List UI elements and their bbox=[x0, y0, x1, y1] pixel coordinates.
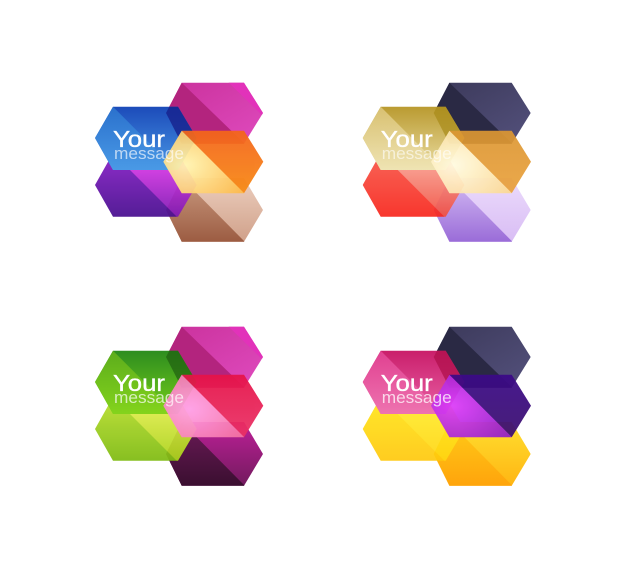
hexagon: amber centre bbox=[431, 130, 531, 194]
label: your message bbox=[381, 126, 452, 163]
hexagon: magenta top right bbox=[169, 326, 263, 388]
label: your message: message bbox=[114, 145, 184, 163]
infographic: gold and red hexagons bbox=[358, 80, 538, 244]
hexagon: blue upper left bbox=[95, 106, 196, 170]
label: your message bbox=[381, 370, 452, 407]
label: your message bbox=[113, 370, 184, 407]
hexagon: khaki upper left bbox=[362, 106, 464, 170]
infographic: green and pink hexagons bbox=[90, 324, 270, 488]
label: your message: Your bbox=[113, 126, 165, 152]
hexagon: red lower left bbox=[362, 162, 464, 217]
hexagon: orange centre bbox=[163, 130, 264, 194]
hexagon: pink centre bbox=[163, 374, 264, 438]
hexagon: amber bottom right bbox=[434, 422, 531, 486]
hexagon: magenta top right bbox=[169, 82, 263, 144]
hexagon: lilac bottom right bbox=[435, 186, 530, 242]
hexagon: navy top right bbox=[436, 82, 530, 144]
infographic set bbox=[95, 82, 531, 486]
hexagon: purple lower left bbox=[95, 162, 196, 217]
label: your message: message bbox=[114, 389, 184, 407]
infographic: pink and yellow hexagons bbox=[358, 324, 538, 488]
hexagon: tan bottom right bbox=[166, 186, 263, 242]
label: your message: Your bbox=[381, 370, 433, 396]
hexagon: lime lower left bbox=[95, 406, 196, 461]
label: your message: message bbox=[382, 145, 452, 163]
hexagon: green upper left bbox=[95, 350, 196, 414]
hexagon: violet centre bbox=[431, 374, 531, 438]
label: your message: Your bbox=[113, 370, 165, 396]
hexagon: yellow lower left bbox=[362, 406, 460, 461]
label: your message bbox=[113, 126, 184, 163]
hexagon: navy top right bbox=[436, 326, 530, 388]
label: your message: message bbox=[382, 389, 452, 407]
label: your message: Your bbox=[381, 126, 433, 152]
hexagon: rose upper left bbox=[362, 350, 464, 414]
infographic: blue and orange hexagons bbox=[90, 80, 270, 244]
hexagon: plum bottom right bbox=[166, 422, 263, 486]
